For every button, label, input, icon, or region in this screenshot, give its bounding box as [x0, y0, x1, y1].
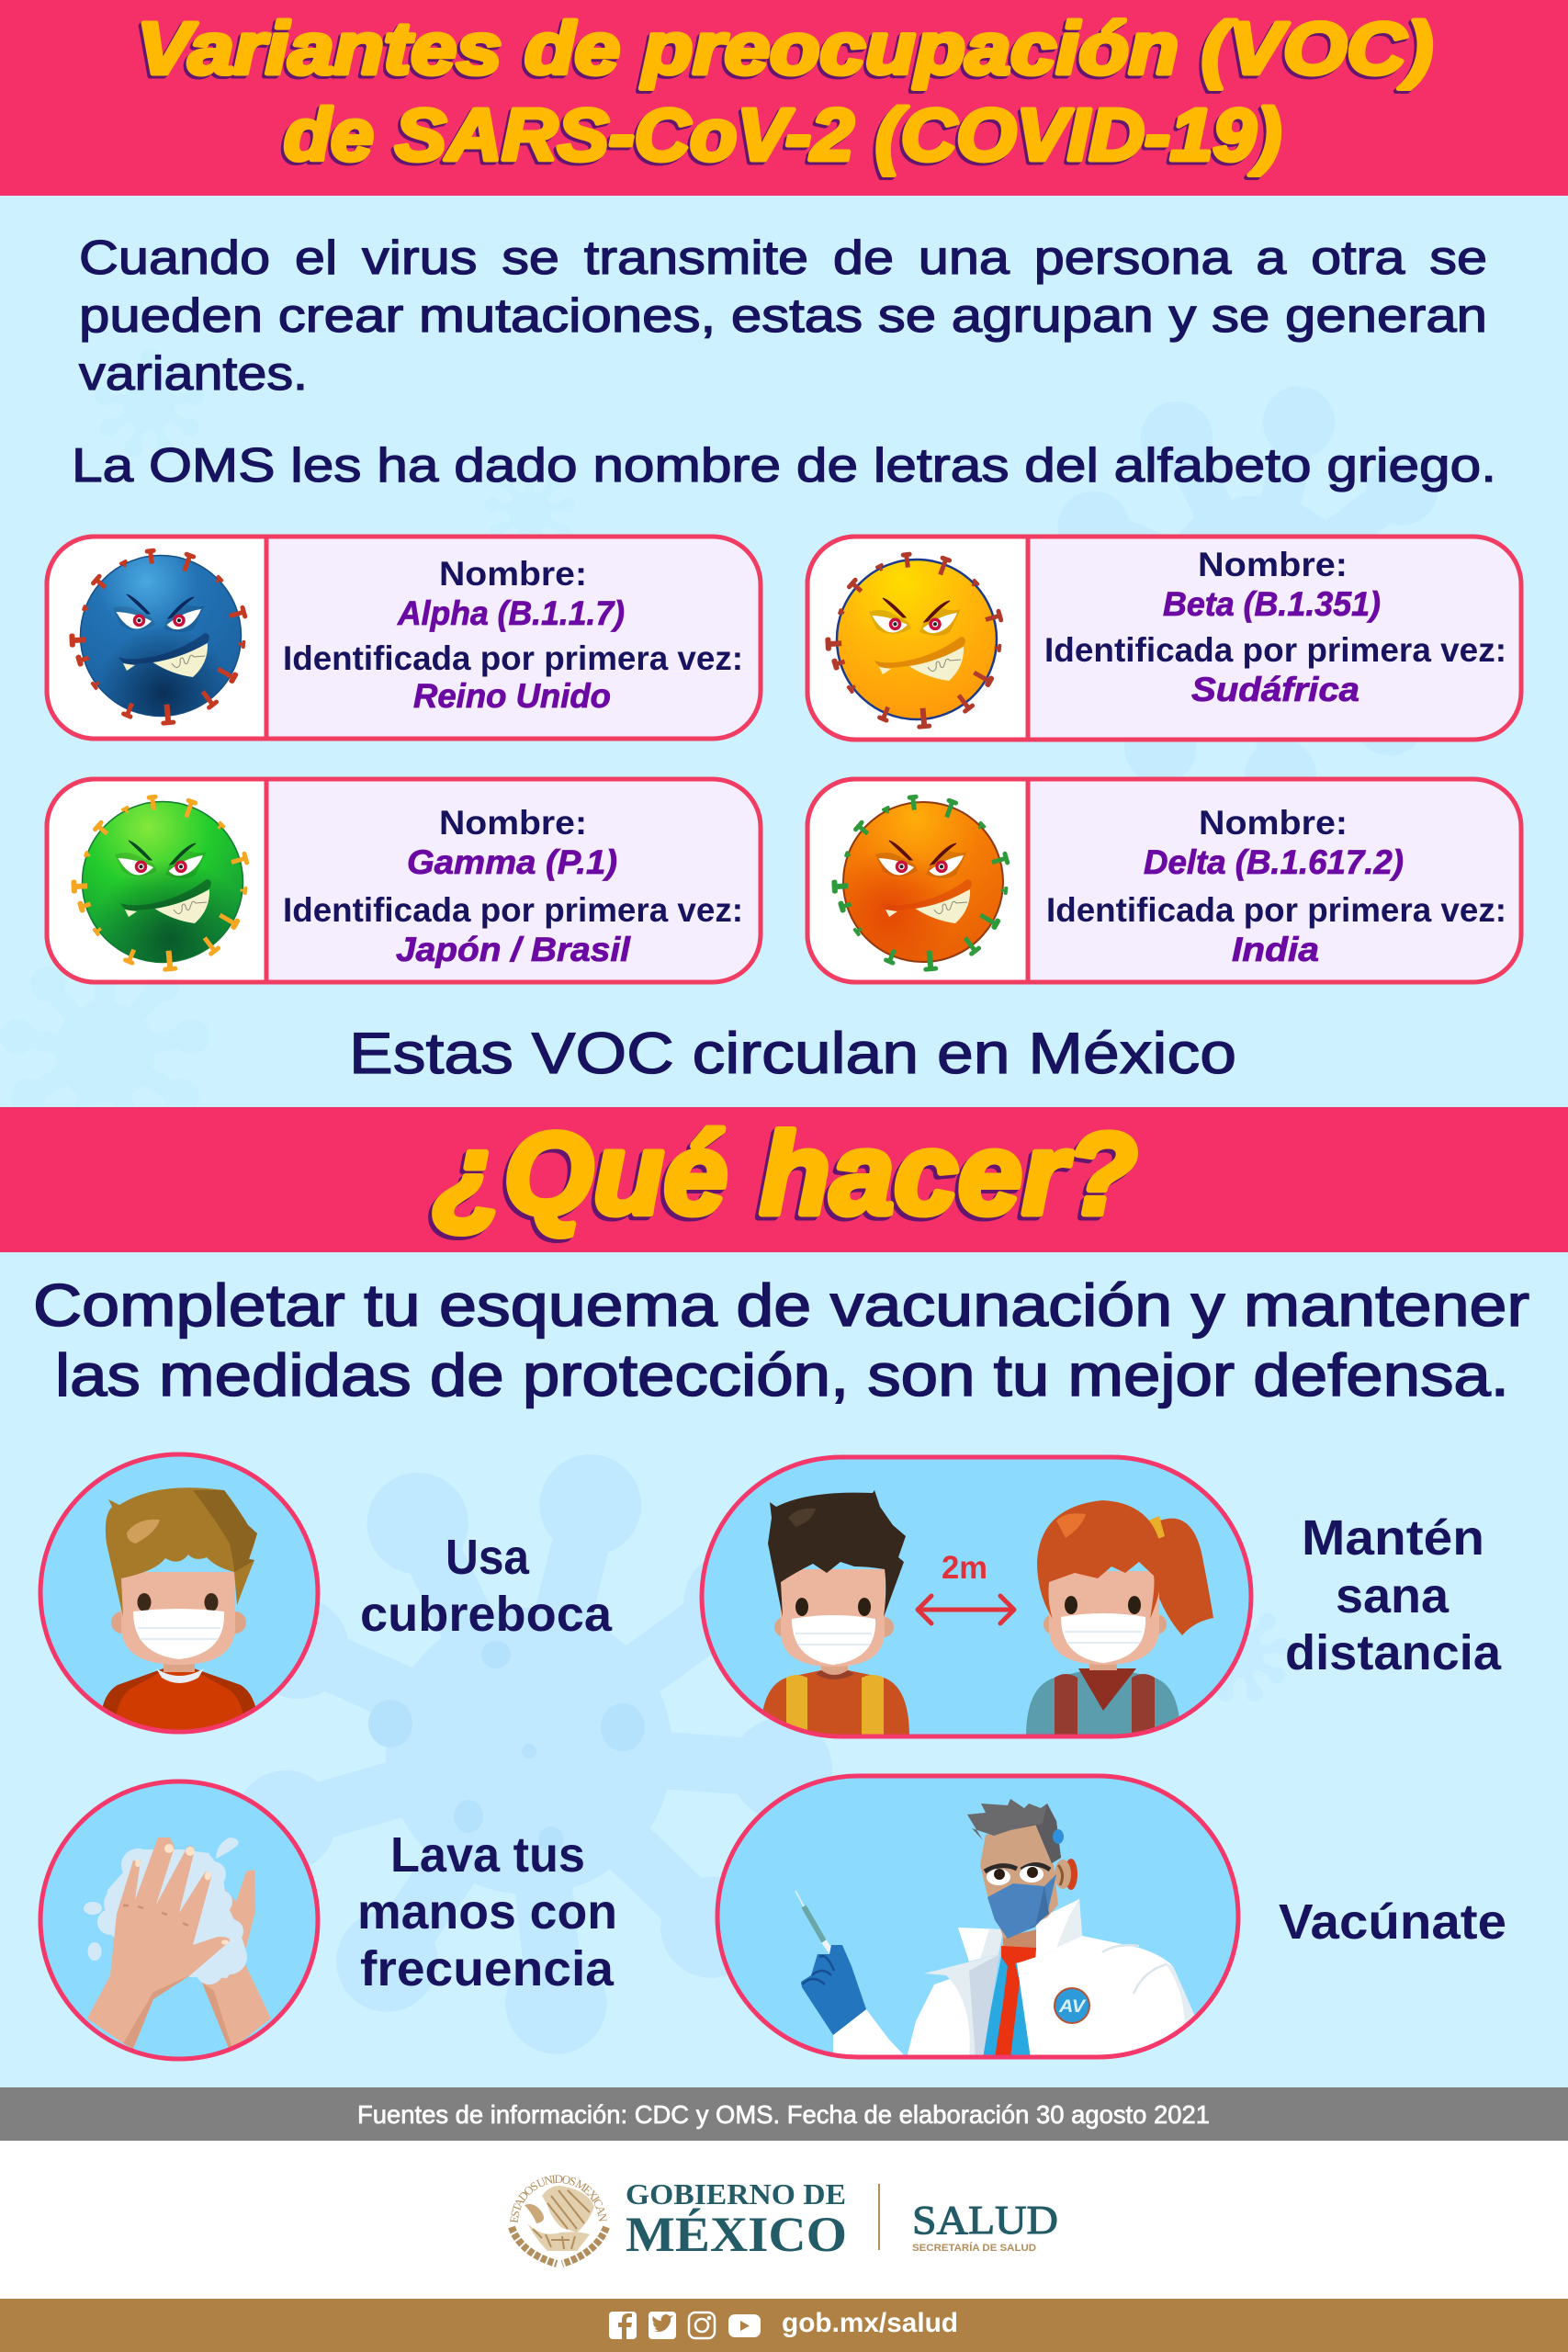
heading: vaccination message [33, 1272, 1529, 1408]
boy [761, 1670, 909, 1736]
label: vaccinate: Vacúnate [1279, 1894, 1506, 1950]
background virus silhouettes [0, 339, 1514, 2104]
Delta text: Identificada por primera vez: [1046, 891, 1506, 929]
wordmark: MÉXICO [626, 2207, 847, 2262]
subheading: WHO naming: La OMS les ha dado nombre de letras del alfabeto griego. [72, 439, 1496, 492]
Gamma text: Identificada por primera vez: [283, 891, 743, 929]
label: wash hands: manos con [357, 1884, 617, 1939]
label: wash hands: frecuencia [360, 1941, 615, 1996]
head [980, 1824, 1058, 1939]
panel: Alpha [47, 537, 761, 739]
panel: hand washing [40, 1781, 318, 2059]
intro paragraph [79, 232, 1487, 401]
panel: doctor with vaccine: AV [1058, 1997, 1086, 2017]
Delta text: Nombre: [1199, 804, 1348, 842]
Delta text [1046, 804, 1506, 968]
wordmark: GOBIERNO DE [626, 2177, 846, 2211]
banner: what to do [0, 1107, 1568, 1252]
Beta text: Identificada por primera vez: [1044, 631, 1506, 669]
label: mask: cubreboca [360, 1587, 613, 1642]
footer band [0, 2299, 1568, 2352]
intro paragraph: Cuando el virus se transmite de una persona a otra se [79, 232, 1487, 285]
syringe [795, 1891, 804, 1906]
intro paragraph: variantes. [79, 347, 308, 401]
Alpha text [283, 555, 743, 715]
label: wash hands: Lava tus [390, 1827, 585, 1883]
Delta text: Delta (B.1.617.2) [1144, 843, 1404, 881]
back hand [202, 1870, 271, 2051]
label: mask [360, 1530, 613, 1642]
Beta text: Nombre: [1198, 546, 1348, 583]
label: wash hands [357, 1827, 617, 1996]
icon: yellow virus [826, 552, 1003, 729]
Alpha text: Identificada por primera vez: [283, 639, 743, 677]
label: distance: sana [1336, 1568, 1450, 1623]
label: distance [1285, 1510, 1502, 1680]
emblem [508, 2176, 610, 2267]
icon: orange virus [832, 795, 1010, 971]
label: distance: Mantén [1302, 1510, 1484, 1566]
heading: VOC in Mexico: Estas VOC circulan en México [349, 1022, 1236, 1086]
icon: youtube [728, 2314, 761, 2337]
Gamma text [283, 804, 743, 968]
mask [987, 1874, 1056, 1939]
Gamma text: Japón / Brasil [396, 931, 631, 968]
health ministry wordmark: SALUD [912, 2198, 1058, 2243]
banner heading: ¿Qué hacer? [434, 1109, 1137, 1238]
sleeve [833, 2009, 904, 2054]
panel: doctor with vaccine [717, 1776, 1238, 2058]
coat [1017, 1936, 1194, 2054]
emblem: ESTADOS UNIDOS MEXICANOS [510, 2176, 607, 2223]
icon: facebook [609, 2312, 637, 2339]
glove [801, 1945, 866, 2035]
panel: Delta [807, 779, 1521, 982]
title: de SARS-CoV-2 (COVID-19) [284, 94, 1281, 175]
icon: twitter [649, 2312, 676, 2339]
arrow: two metres [918, 1596, 1014, 1623]
Beta text: Sudáfrica [1191, 671, 1359, 708]
heading: vaccination message: las medidas de protección, son tu mejor defensa. [55, 1341, 1509, 1408]
icon: green virus [72, 795, 249, 971]
shirt and tie [981, 1957, 1031, 2058]
front hand [87, 1838, 230, 2043]
health ministry wordmark: SECRETARÍA DE SALUD [912, 2242, 1036, 2254]
Alpha text: Nombre: [439, 555, 587, 593]
Alpha text: Alpha (B.1.1.7) [397, 594, 625, 632]
sources text: Fuentes de información: CDC y OMS. Fecha de elaboración 30 agosto 2021 [357, 2100, 1210, 2129]
intro paragraph: pueden crear mutaciones, estas se agrupan y se generan [79, 289, 1487, 343]
neck [1003, 1929, 1038, 1951]
Alpha text: Reino Unido [413, 677, 611, 715]
wordmark [626, 2177, 847, 2262]
label: 2m distance: 2m [942, 1550, 987, 1586]
sources bar [0, 2087, 1568, 2141]
label: mask: Usa [446, 1530, 530, 1585]
panel: child with mask [40, 1454, 318, 1736]
footer url: gob.mx/salud [782, 2308, 958, 2338]
label: distance: distancia [1285, 1625, 1502, 1680]
Beta text [1044, 546, 1506, 708]
icon: blue virus [70, 548, 247, 725]
Gamma text: Nombre: [439, 804, 587, 842]
panel: two children at distance [702, 1457, 1251, 1736]
title banner [0, 0, 1568, 196]
badge [1055, 1988, 1089, 2023]
foam [97, 1849, 247, 1984]
Gamma text: Gamma (P.1) [407, 843, 617, 881]
title [137, 7, 1433, 175]
Beta text: Beta (B.1.351) [1163, 585, 1381, 623]
Delta text: India [1232, 931, 1319, 968]
icon: instagram [689, 2312, 715, 2338]
girl [1153, 1519, 1213, 1635]
heading: vaccination message: Completar tu esquema de vacunación y mantener [33, 1272, 1529, 1339]
title: Variantes de preocupación (VOC) [137, 7, 1433, 89]
panel: Gamma [47, 779, 761, 982]
panel: Beta [807, 537, 1521, 740]
